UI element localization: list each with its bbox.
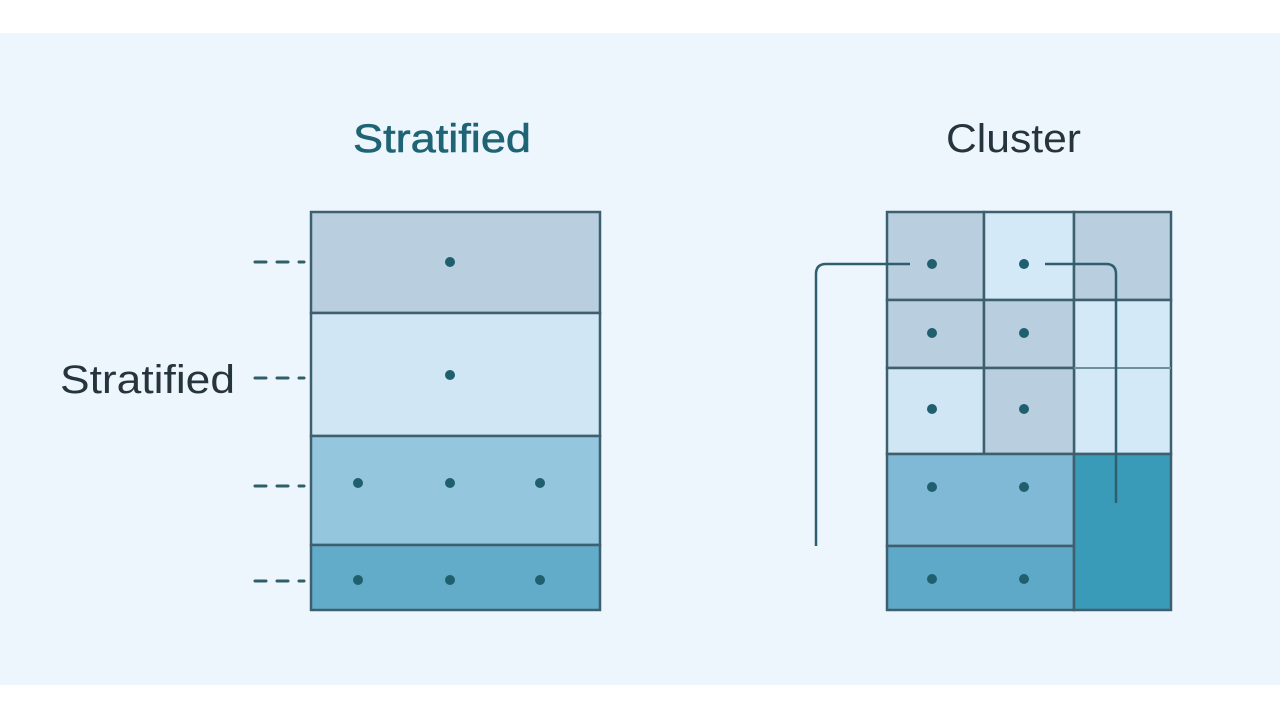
title: Stratified: Stratified — [353, 117, 531, 161]
side label: Stratified: Stratified — [60, 358, 235, 402]
dashed leader lines — [255, 262, 304, 581]
connector lines — [816, 264, 1116, 546]
cluster sample dots — [927, 259, 1029, 584]
panel: stratified strata — [311, 212, 600, 610]
title: Cluster: Cluster — [946, 117, 1081, 161]
stratified sample dots — [353, 257, 545, 585]
panel: cluster grid — [887, 212, 1171, 610]
